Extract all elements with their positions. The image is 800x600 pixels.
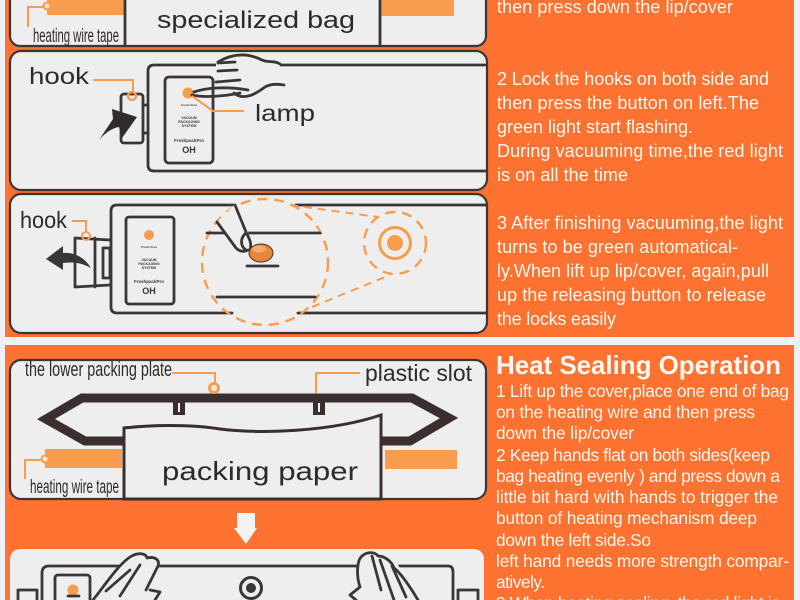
magnified button view (202, 199, 328, 325)
text block: step 3: the locks easily (497, 309, 616, 329)
icon: right hand (350, 552, 420, 600)
card: lock hooks and press button: SYSTEM (182, 124, 196, 128)
card: packing paper: the lower packing plate (25, 359, 172, 381)
card: press with both hands (10, 549, 484, 600)
text block: heat sealing steps: button of heating mechanism deep (496, 508, 757, 528)
panel: heat sealing operation (5, 345, 794, 600)
text block: heat sealing steps (496, 381, 789, 600)
card: release hooks: Fresh Area (141, 245, 157, 249)
text block: step 3: 3 After finishing vacuuming,the light (497, 213, 783, 233)
card: specialized bag (10, 0, 486, 47)
card: lock hooks and press button (10, 51, 487, 190)
card: lock hooks and press button: FreshpackPro (174, 138, 204, 143)
text block: step 2: green light start flashing. (497, 117, 693, 137)
icon: button close-up (364, 212, 426, 274)
card: specialized bag: specialized bag (157, 7, 355, 34)
card: lock hooks and press button: OH (182, 145, 196, 155)
card: lock hooks and press button: PACKAGING (178, 120, 200, 124)
card: packing paper (10, 359, 486, 499)
card: packing paper: packing paper (162, 456, 358, 486)
text block: step 3: turns to be green automatical- (497, 237, 738, 257)
card: lock hooks and press button: Fresh Area (181, 103, 197, 107)
card: packing paper: plastic slot (365, 360, 473, 386)
card: lock hooks and press button: VACUUM (181, 116, 197, 120)
card: release hooks: OH (142, 286, 156, 296)
card: release hooks: hook (20, 207, 67, 233)
dashed zoom lines (290, 205, 390, 307)
text block: step 3: ly.When lift up lip/cover, again,pull (497, 261, 769, 281)
card: lock hooks and press button: lamp (255, 100, 315, 126)
text block: heat sealing steps: atively. (496, 572, 545, 592)
card: release hooks: VACUUM (141, 258, 157, 262)
text block: heat sealing steps: 2 Keep hands flat on both sides(keep (496, 445, 770, 465)
text block: step 3: up the releasing button to release (497, 285, 766, 305)
card: release hooks: SYSTEM (142, 266, 156, 270)
panel: vacuum operation (5, 0, 794, 337)
text block: step 2: then press the button on left.The (497, 93, 759, 113)
text block: heat sealing steps: 1 Lift up the cover,place one end of bag (496, 381, 789, 401)
card: specialized bag: heating wire tape (33, 26, 119, 47)
text block: heat sealing steps: on the heating wire and then press (496, 402, 755, 422)
text block: step 2: 2 Lock the hooks on both side and (497, 69, 769, 89)
card: release hooks: PACKAGING (138, 262, 160, 266)
text block: step 3 (497, 213, 783, 329)
card: packing paper: heating wire tape (30, 477, 119, 498)
text block: heat sealing steps: down the left side.So (496, 530, 651, 550)
heading: heat sealing operation: Heat Sealing Operation (496, 350, 781, 380)
text block: step 2: During vacuuming time,the red light (497, 141, 783, 161)
text block: heat sealing steps: bag heating evenly ) and press down a (496, 466, 780, 486)
text block: heat sealing steps: left hand needs more strength compar- (496, 551, 789, 571)
icon: left hand (92, 552, 162, 600)
text block: step 2: is on all the time (497, 165, 628, 185)
text block: heat sealing steps: down the lip/cover (496, 423, 634, 443)
arrow: down (234, 513, 257, 544)
card: release hooks: FreshpackPro (134, 279, 164, 284)
text block: heat sealing steps: little bit hard with hands to trigger the (496, 487, 778, 507)
text block: step 2 (497, 69, 783, 185)
card: release hooks (10, 194, 487, 333)
card: lock hooks and press button: hook (29, 63, 90, 89)
